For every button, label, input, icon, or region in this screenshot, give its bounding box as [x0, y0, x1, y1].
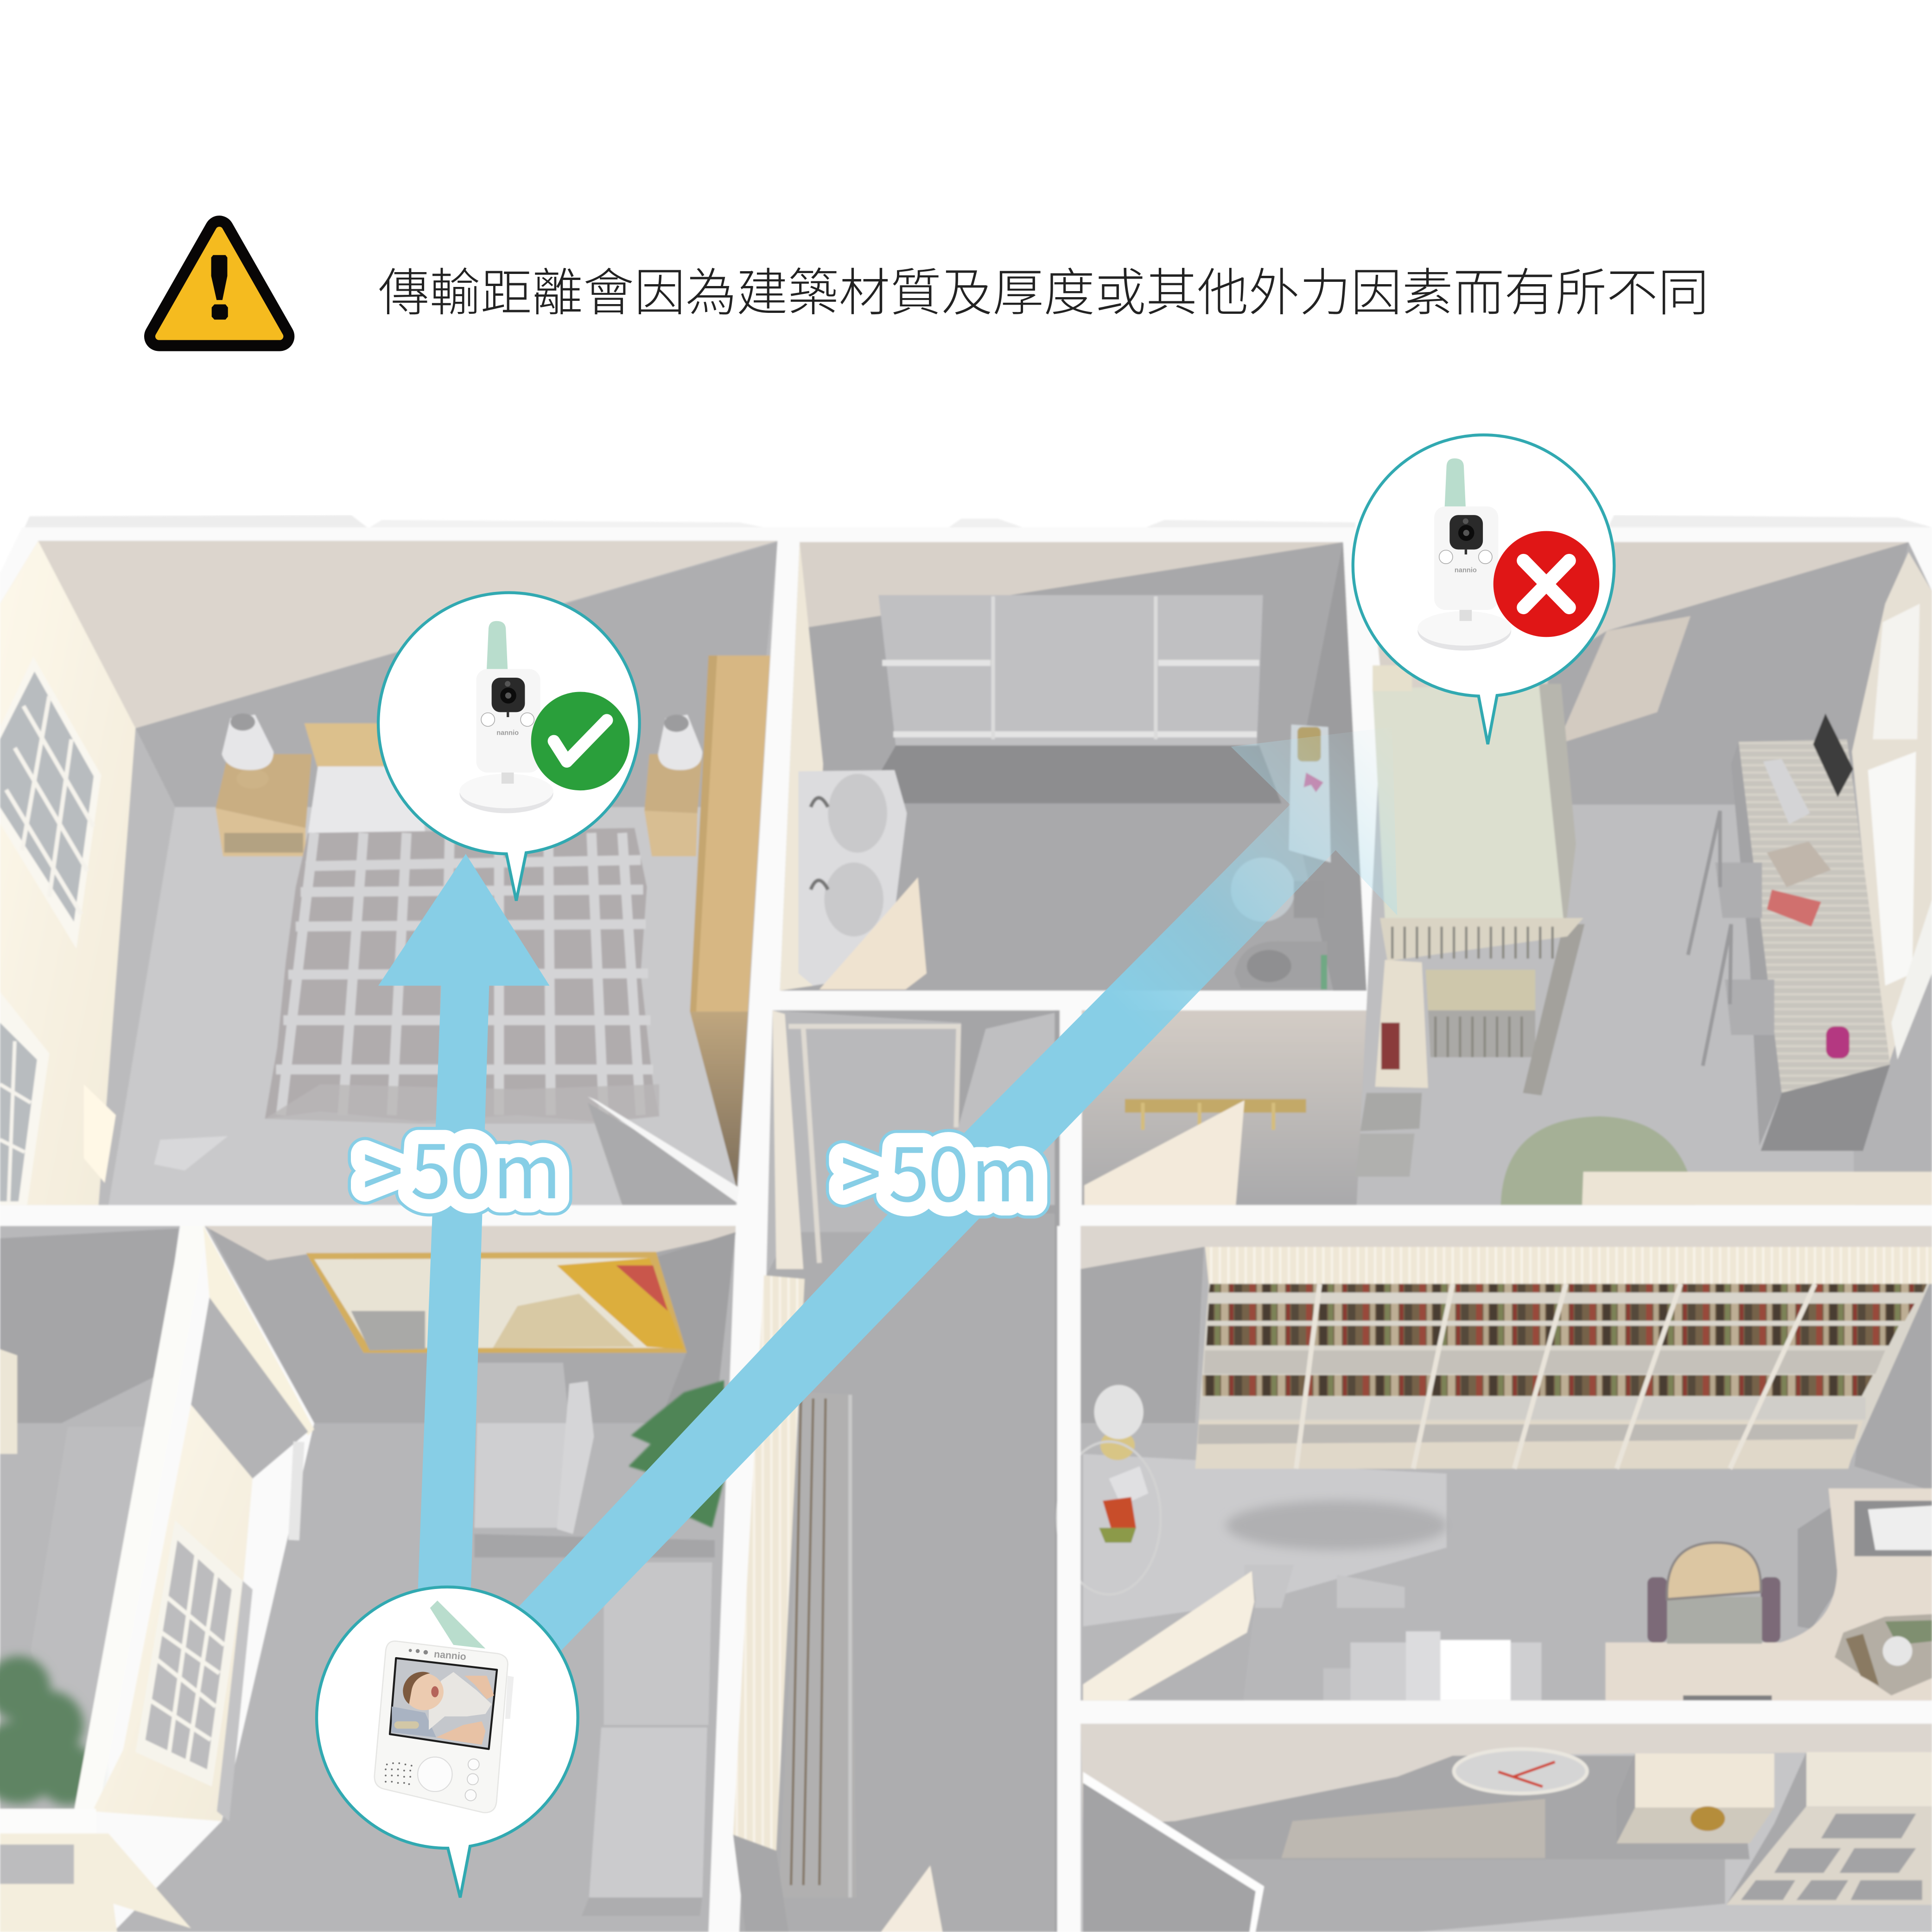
bed blanket	[265, 828, 659, 1124]
camera product	[459, 621, 553, 813]
desk	[1606, 1488, 1932, 1700]
title text: 傳輸距離會因為建築材質及厚度或其他外力因素而有所不同	[378, 265, 1709, 322]
cube shelf	[1617, 1754, 1774, 1843]
floor plan	[0, 515, 1932, 1932]
label: >50m right: >50m	[840, 1116, 1039, 1223]
floor light patch	[154, 1136, 228, 1170]
callout: parent monitor	[317, 1587, 578, 1898]
vertical wall between hallway and library	[1057, 1226, 1080, 1932]
room: far left room	[0, 1226, 180, 1809]
room: top-left bedroom	[0, 541, 777, 1205]
callout: camera in range	[378, 593, 640, 901]
keyboard	[1763, 759, 1810, 824]
library door	[1083, 1571, 1256, 1700]
plant left	[0, 1656, 99, 1805]
painting	[306, 1252, 687, 1353]
room: top-right kids room	[1355, 542, 1932, 1205]
kids room back wall	[1368, 542, 1908, 805]
camera product: nannio	[496, 730, 519, 737]
far left lower cream block	[0, 1809, 191, 1932]
room: hallway entry	[739, 1010, 1060, 1932]
bunk bed	[1373, 665, 1584, 1095]
floor shadow	[1226, 1501, 1448, 1550]
sofa chair	[474, 1363, 715, 1557]
camera product	[1417, 458, 1511, 651]
bed ladder shelf	[1355, 960, 1428, 1177]
room: library	[1057, 1226, 1932, 1700]
bottom door	[1083, 1772, 1264, 1932]
lit patches on the wall	[84, 1084, 116, 1183]
wall tops	[0, 515, 1932, 1932]
living room window	[135, 1520, 243, 1786]
side table with books	[1057, 1442, 1161, 1595]
bathroom right wall	[1291, 542, 1366, 991]
wooden table edge	[1582, 1172, 1932, 1205]
bedroom window upper	[0, 657, 101, 949]
kids room window	[1852, 552, 1932, 1074]
room: bathroom	[780, 542, 1366, 991]
patterned book	[1767, 842, 1831, 887]
bathroom back wall	[800, 542, 1343, 803]
monitor speaker	[385, 1762, 413, 1785]
coat hook rail	[1125, 1099, 1306, 1130]
wardrobe	[690, 655, 770, 1189]
hallway door	[881, 1865, 942, 1932]
label: >50m left: >50m	[362, 1112, 561, 1220]
monitor screen	[390, 1658, 497, 1749]
lower sink	[1234, 941, 1327, 990]
label: >50m left: >50m	[362, 1112, 561, 1220]
double sink	[798, 770, 907, 986]
room: bottom-right	[1080, 1724, 1932, 1932]
plant right	[629, 1380, 724, 1528]
pillows	[308, 766, 425, 833]
monitor product	[375, 1601, 514, 1812]
label: >50m left: >50m	[362, 1112, 561, 1220]
monitor buttons	[465, 1759, 479, 1801]
lamp left	[222, 713, 273, 788]
label: >50m right: >50m	[840, 1116, 1039, 1223]
shelf and toiletries	[1289, 724, 1331, 863]
bookshelf	[1195, 1247, 1932, 1469]
warning icon	[159, 230, 280, 337]
camera product: nannio	[1455, 567, 1477, 574]
magazines	[1835, 1614, 1932, 1696]
wall clock	[1454, 1749, 1587, 1793]
closet door	[1084, 1100, 1245, 1205]
bedroom window lower	[0, 992, 49, 1205]
hallway shelves	[733, 1275, 856, 1932]
desk	[1731, 739, 1890, 1151]
grid shelf	[1726, 1752, 1932, 1905]
check badge	[531, 692, 629, 790]
kids room right wall	[1848, 542, 1932, 1205]
sofa	[582, 1563, 712, 1916]
chairs	[1688, 811, 1774, 1066]
lamp right	[658, 715, 702, 770]
office chair	[1647, 1543, 1780, 1644]
cross badge	[1493, 531, 1599, 637]
living room partition wall	[74, 1226, 314, 1821]
monitor product: nannio	[433, 1648, 467, 1662]
striped book	[1767, 890, 1821, 927]
monitor d-pad	[418, 1757, 452, 1792]
arrow: vertical signal	[378, 854, 550, 1595]
label: >50m right: >50m	[840, 1116, 1039, 1223]
room: closet with coat hooks	[1082, 1010, 1386, 1205]
bathroom left wall	[780, 542, 823, 991]
living room back wall	[204, 1226, 736, 1423]
nightstand right	[644, 754, 702, 856]
callout: camera out of range	[1353, 435, 1614, 744]
cup	[1826, 1026, 1849, 1058]
room: living room	[114, 1226, 736, 1932]
monitor	[1813, 713, 1853, 797]
headboard	[305, 723, 407, 769]
globe lamp	[1094, 1385, 1144, 1460]
bedroom door	[588, 1097, 739, 1205]
rug	[1501, 1116, 1696, 1205]
arrow: diagonal signal	[517, 727, 1397, 1651]
toilet	[1231, 858, 1325, 922]
bathroom door	[820, 877, 927, 990]
nightstand left	[216, 754, 312, 856]
central white boxes	[1323, 1631, 1541, 1700]
